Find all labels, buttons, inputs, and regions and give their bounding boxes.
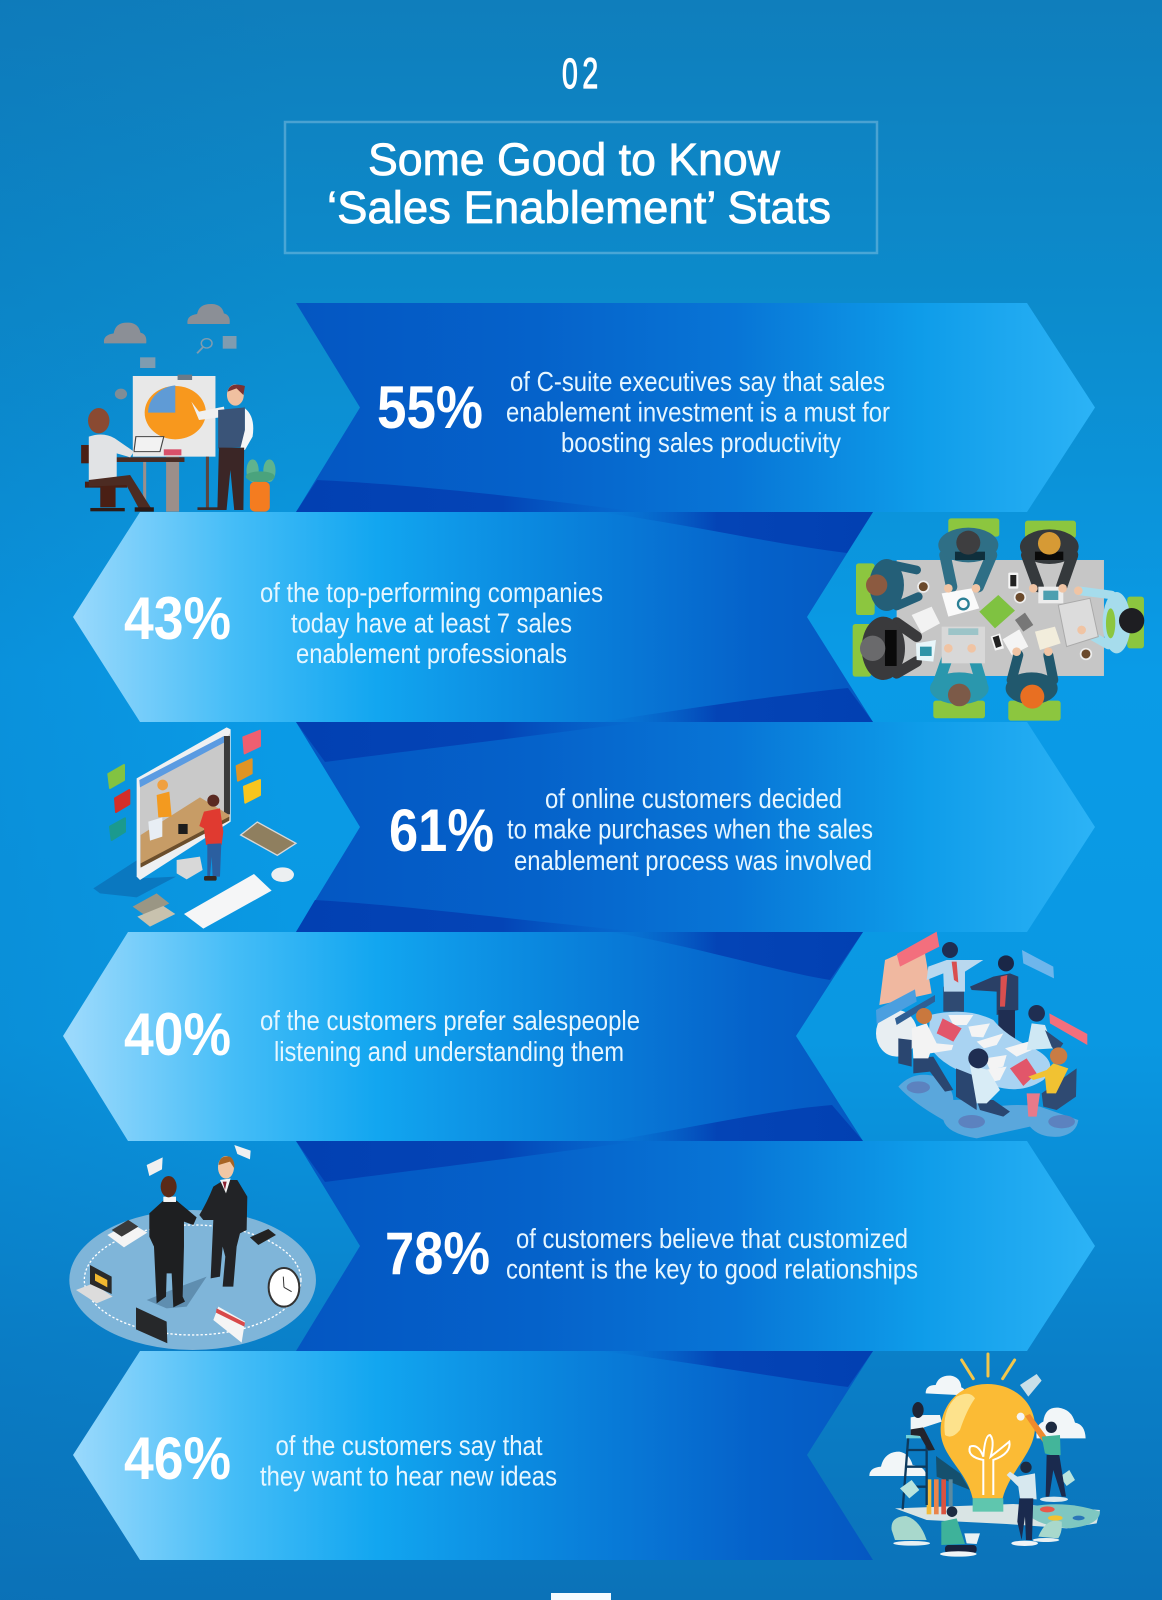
icon: meeting table top view bbox=[853, 518, 1144, 721]
panel: stat 55%: boosting sales productivity bbox=[561, 427, 841, 458]
panel: stat 40%: 40% bbox=[124, 1001, 231, 1068]
title box: Some Good to Know bbox=[368, 134, 780, 185]
section number: 02 bbox=[562, 49, 603, 97]
panel: stat 61%: enablement process was involved bbox=[514, 845, 872, 876]
panel: stat 78%: of customers believe that customized bbox=[516, 1223, 908, 1254]
panel: stat 61%: 61% bbox=[389, 797, 494, 864]
panel: stat 46%: of the customers say that bbox=[276, 1430, 543, 1461]
icon: team at table bbox=[876, 932, 1087, 1138]
panel: stat 61%: to make purchases when the sales bbox=[507, 814, 873, 845]
title box: ‘Sales Enablement’ Stats bbox=[327, 182, 831, 233]
panel: stat 40%: listening and understanding them bbox=[274, 1036, 624, 1067]
panel: stat 46% bbox=[73, 1351, 873, 1560]
panel: stat 61%: of online customers decided bbox=[545, 783, 842, 814]
icon: presentation at desk bbox=[81, 304, 276, 512]
panel: stat 46%: 46% bbox=[124, 1425, 231, 1492]
panel: stat 78%: 78% bbox=[385, 1220, 490, 1287]
panel: stat 55%: of C-suite executives say that sales bbox=[510, 366, 885, 397]
title box bbox=[285, 122, 877, 253]
icon: handshake on platform bbox=[69, 1145, 316, 1350]
panel: stat 61% bbox=[296, 722, 1095, 932]
panel: stat 78%: content is the key to good relationships bbox=[506, 1254, 918, 1284]
panel: stat 78% bbox=[296, 1141, 1095, 1351]
icon: online store on monitor bbox=[93, 727, 296, 929]
panel: stat 43%: of the top-performing companies bbox=[260, 577, 603, 608]
panel: stat 40%: of the customers prefer salespeople bbox=[260, 1005, 640, 1036]
panel: stat 43%: 43% bbox=[124, 585, 231, 652]
panel: stat 43%: today have at least 7 sales bbox=[291, 608, 572, 638]
panel: stat 55%: enablement investment is a must for bbox=[506, 396, 890, 428]
panel: stat 55% bbox=[296, 303, 1095, 512]
icon: light bulb creative team bbox=[869, 1354, 1100, 1557]
panel: stat 40% bbox=[63, 932, 863, 1141]
panel: stat 55%: 55% bbox=[377, 374, 483, 441]
panel: stat 46%: they want to hear new ideas bbox=[260, 1460, 557, 1492]
bottom bar bbox=[551, 1593, 611, 1600]
panel: stat 43% bbox=[73, 512, 873, 722]
panel: stat 43%: enablement professionals bbox=[296, 638, 567, 669]
